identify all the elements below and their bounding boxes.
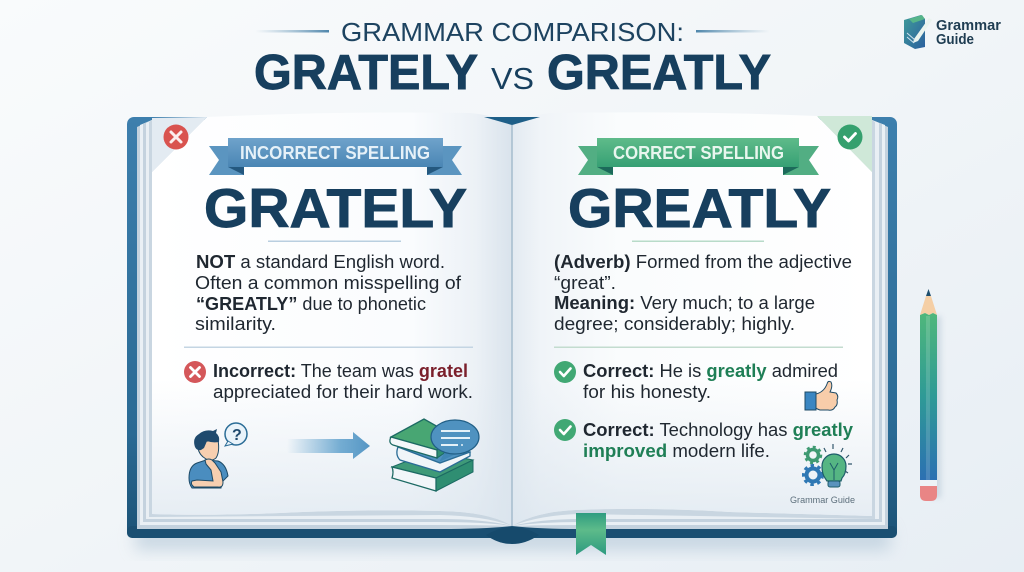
ribbon: incorrect spelling	[209, 138, 462, 175]
icon: confused person	[189, 423, 247, 488]
icon: thumbs up	[805, 381, 838, 410]
correct example two	[583, 420, 853, 461]
incorrect example: appreciated for their hard work.	[213, 382, 473, 402]
main title: VS	[491, 61, 534, 96]
correct example one: for his honesty.	[583, 382, 711, 402]
heading: GREATLY: GREATLY	[568, 177, 831, 239]
main title: GRATELY	[254, 46, 478, 100]
small credit: Grammar Guide	[790, 495, 855, 506]
correct example one: Correct: He is greatly admired	[583, 361, 838, 381]
left page	[152, 112, 512, 526]
badge: correct	[838, 124, 862, 150]
spine top	[484, 117, 540, 125]
icon: gears and light bulb	[804, 444, 852, 487]
left corner fold	[152, 117, 207, 172]
right corner fold	[817, 116, 872, 172]
main title: GREATLY	[547, 46, 771, 100]
book shadow	[135, 528, 890, 550]
ribbon: incorrect spelling: INCORRECT SPELLING	[240, 142, 430, 163]
right page	[512, 112, 872, 526]
icon: incorrect cross	[184, 361, 206, 383]
logo: Grammar Guide: Grammar	[936, 18, 1001, 34]
icon: check two	[554, 419, 576, 441]
incorrect example	[213, 361, 473, 402]
pencil	[920, 289, 941, 501]
bookmark	[576, 513, 606, 555]
gutter	[511, 125, 513, 526]
title	[254, 17, 771, 100]
heading: GRATELY: GRATELY	[204, 177, 467, 239]
logo: Grammar Guide: Guide	[936, 32, 974, 48]
spine bottom	[486, 527, 539, 544]
correct example one	[583, 361, 838, 402]
book cover	[127, 117, 897, 538]
definition text	[554, 252, 852, 334]
icon: confused person: ?	[232, 427, 242, 444]
icon: check one	[554, 361, 576, 383]
definition text: (Adverb) Formed from the adjective	[554, 252, 852, 272]
panel: incorrect spelling	[184, 138, 479, 491]
incorrect example: Incorrect: The team was gratel	[213, 361, 468, 381]
open book	[127, 112, 897, 550]
arrow	[287, 432, 370, 459]
definition text: Meaning: Very much; to a large	[554, 293, 815, 313]
correct example two: Correct: Technology has greatly	[583, 420, 853, 440]
badge: incorrect	[164, 124, 188, 150]
ribbon: correct spelling: CORRECT SPELLING	[613, 142, 784, 163]
left page stack	[137, 120, 512, 529]
definition text: similarity.	[195, 314, 276, 334]
main title	[254, 46, 771, 100]
definition text	[195, 252, 462, 334]
correct example two: improved modern life.	[583, 441, 770, 461]
title kicker: GRAMMAR COMPARISON:	[341, 17, 684, 47]
ribbon: correct spelling	[578, 138, 819, 175]
definition text: Often a common misspelling of	[195, 273, 462, 293]
right page stack	[512, 120, 888, 529]
logo: Grammar Guide	[904, 15, 1001, 49]
definition text: NOT a standard English word.	[196, 252, 445, 272]
icon: stacked books	[390, 419, 479, 491]
icon: logo book	[904, 15, 932, 49]
definition text: “GREATLY” due to phonetic	[196, 294, 426, 314]
panel: correct spelling	[554, 138, 855, 506]
definition text: degree; considerably; highly.	[554, 314, 795, 334]
definition text: “great”.	[554, 273, 616, 293]
